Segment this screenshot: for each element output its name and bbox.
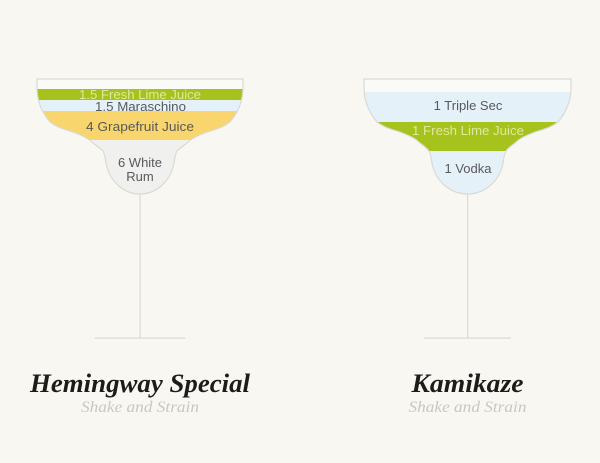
ingredient: white rum: Rum (126, 169, 154, 184)
subtitle: Kamikaze: Shake and Strain (408, 399, 526, 416)
glass layers: Hemingway Special (38, 89, 242, 140)
subtitle: Hemingway Special: Shake and Strain (81, 399, 199, 416)
base (95, 338, 185, 339)
title: Kamikaze: Kamikaze (410, 369, 524, 398)
ingredient: triple sec: 1 Triple Sec (434, 98, 503, 113)
base (424, 338, 511, 339)
ingredient: lime juice: 1 Fresh Lime Juice (412, 123, 524, 138)
glass outline (364, 79, 571, 194)
ingredient: grapefruit juice: 4 Grapefruit Juice (86, 119, 194, 134)
ingredient: maraschino: 1.5 Maraschino (95, 99, 186, 114)
ingredient: lime juice: 1.5 Fresh Lime Juice (79, 87, 201, 102)
glass: Kamikaze (360, 79, 575, 339)
ingredient: vodka: 1 Vodka (444, 161, 492, 176)
glass layers: Kamikaze (365, 92, 570, 194)
stem (467, 194, 468, 338)
glass outline (37, 79, 243, 194)
title: Hemingway Special: Hemingway Special (29, 369, 251, 398)
stem (140, 194, 141, 338)
glass: Hemingway Special (30, 79, 250, 339)
ingredient: white rum: 6 White (118, 155, 162, 170)
